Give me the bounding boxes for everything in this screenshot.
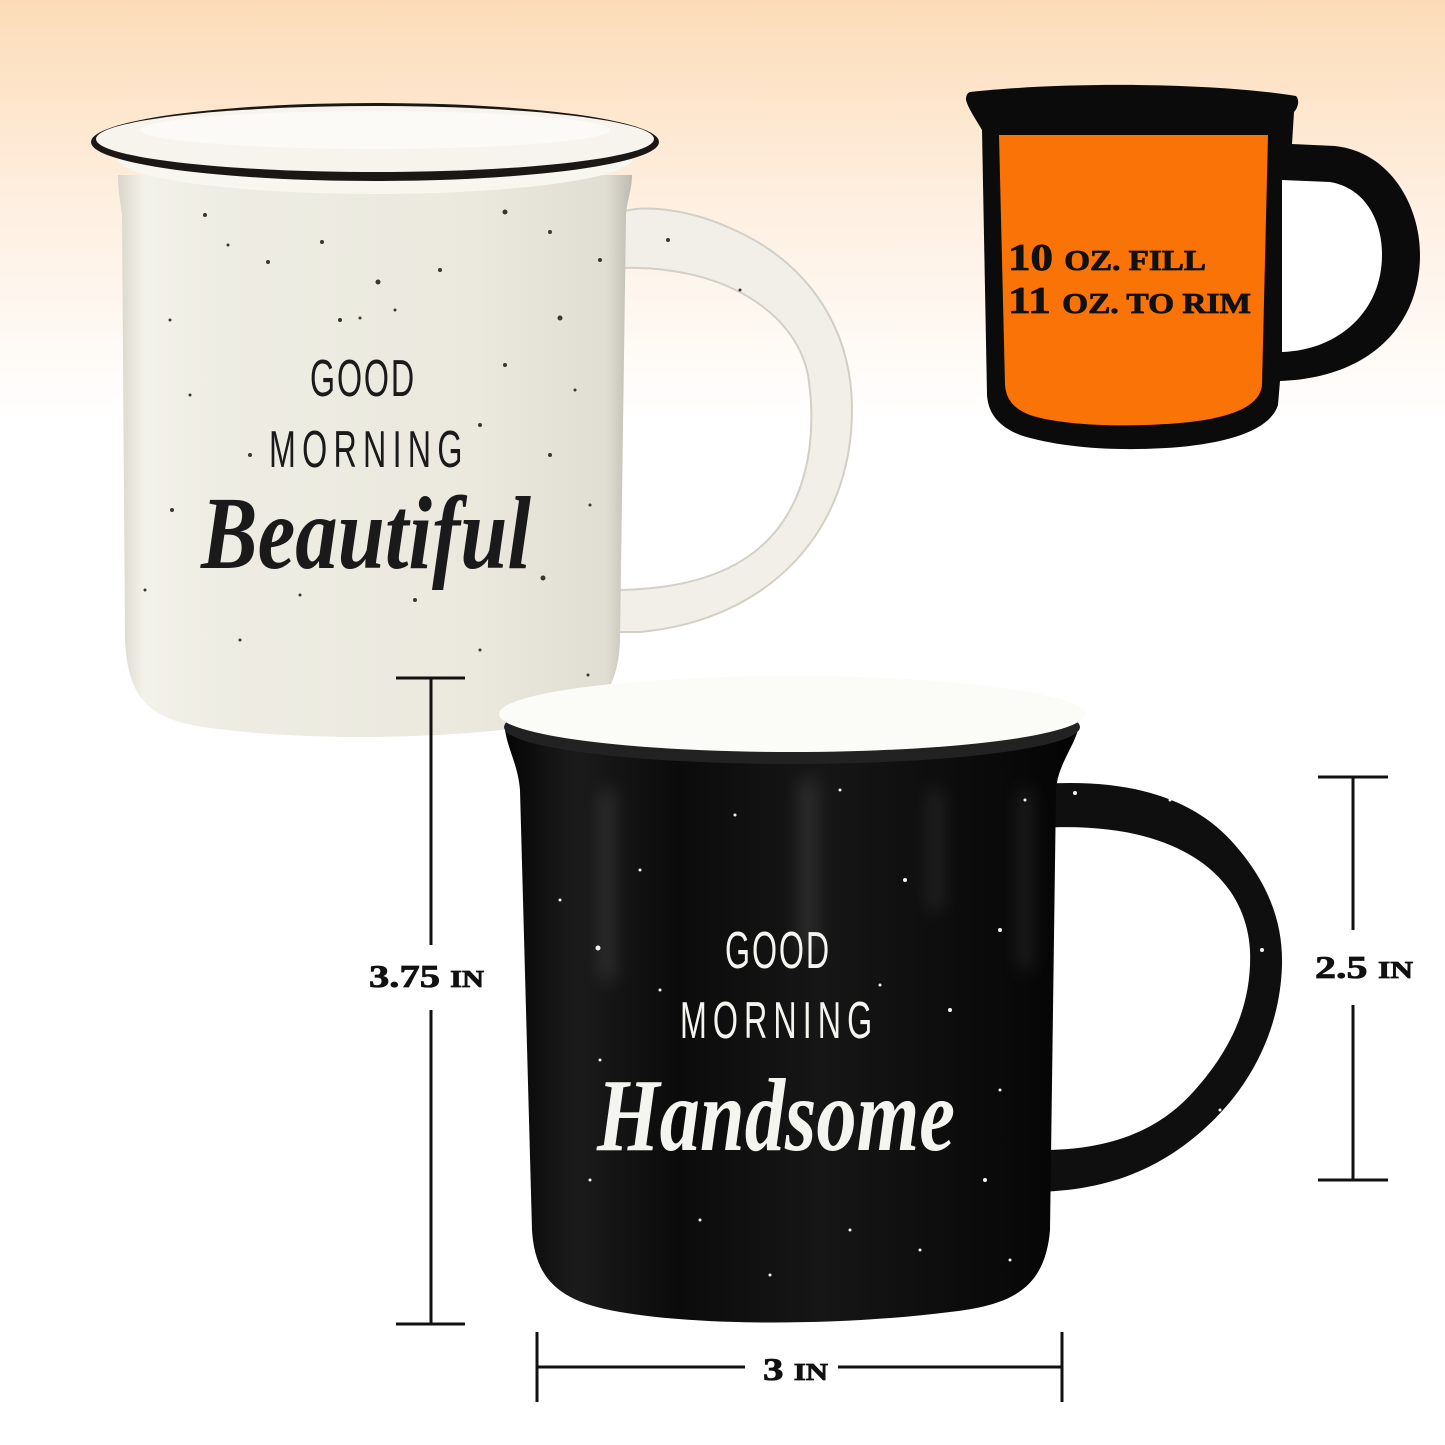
- dimension: handle height 2.5 in: [1315, 777, 1414, 1180]
- white mug text: [200, 350, 531, 591]
- fill label: 10 OZ. FILL: [1008, 237, 1206, 279]
- white mug text: Beautiful: [200, 476, 531, 591]
- black mug body: [505, 730, 1078, 1322]
- black mug text: MORNING: [680, 992, 872, 1050]
- white mug: [91, 103, 852, 737]
- dimension: width 3 in: 3 IN: [763, 1351, 829, 1387]
- dimension: height 3.75 in: 3.75 IN: [369, 958, 485, 994]
- dimension: handle height 2.5 in: 2.5 IN: [1315, 949, 1414, 985]
- orange fill: [999, 135, 1268, 425]
- black mug text: GOOD: [725, 922, 829, 980]
- black mug text: Handsome: [596, 1058, 955, 1173]
- white mug text: MORNING: [269, 421, 462, 479]
- capacity mug icon: [966, 85, 1420, 449]
- white mug rim: [91, 103, 659, 194]
- dimension: height 3.75 in: [369, 678, 485, 1324]
- white mug handle: [610, 209, 852, 632]
- handle opening: [1282, 180, 1382, 352]
- dimension: width 3 in: [537, 1332, 1062, 1402]
- black mug: [499, 676, 1282, 1322]
- white mug text: GOOD: [310, 350, 414, 408]
- black mug text: [596, 922, 955, 1173]
- white mug body: [118, 175, 632, 737]
- black mug rim: [499, 676, 1085, 764]
- black mug speckles: [558, 788, 1264, 1276]
- black mug reflections: [600, 780, 1030, 980]
- fill label: 11 OZ. TO RIM: [1008, 280, 1251, 322]
- background: [0, 0, 1445, 420]
- black mug handle: [1030, 783, 1282, 1192]
- icon silhouette: [966, 85, 1420, 449]
- white mug speckles: [144, 210, 742, 676]
- fill label: [1008, 237, 1251, 322]
